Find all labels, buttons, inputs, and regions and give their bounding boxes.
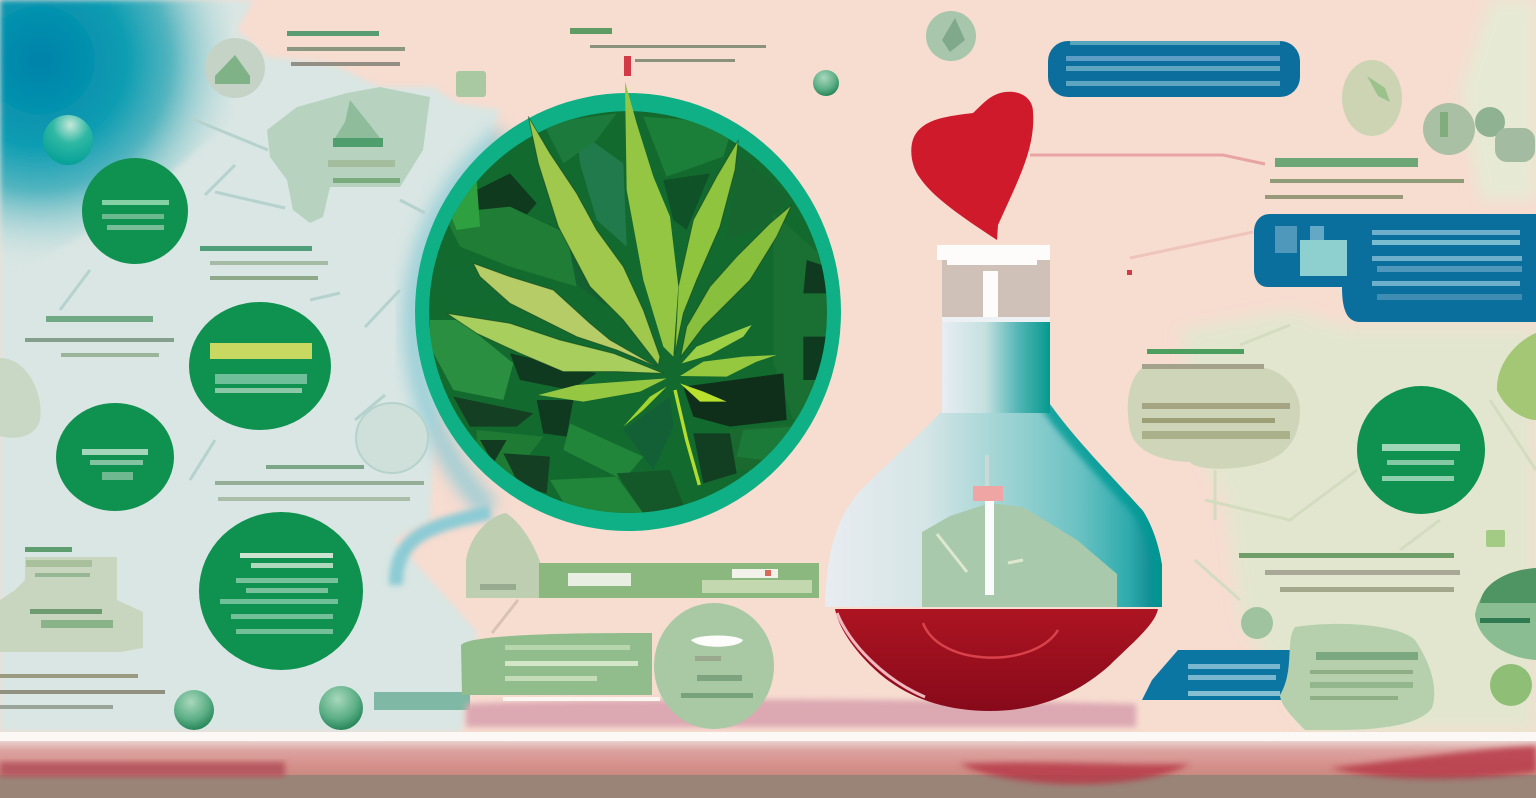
icon: small blob xyxy=(1241,607,1273,639)
pink shadow under flask xyxy=(466,700,1136,727)
connector lines left xyxy=(60,118,425,480)
icon: green sphere bottom 2 xyxy=(319,686,363,730)
faint foliage veins right xyxy=(1195,325,1536,600)
panel: green circle 2 xyxy=(189,302,331,430)
icon: chart tile xyxy=(1275,226,1347,276)
icon: top leaf badge xyxy=(926,11,976,61)
panel: green circle right xyxy=(1357,386,1485,514)
icon: small square top xyxy=(456,71,486,97)
blue glow beside leaf circle xyxy=(414,135,505,510)
icon: small sphere top xyxy=(813,70,839,96)
right side icons xyxy=(1241,60,1536,706)
text block: right lower xyxy=(1239,553,1460,592)
panel: right beige blob xyxy=(1128,349,1300,469)
flask cap xyxy=(937,245,1050,260)
panel: right lower blob xyxy=(1280,624,1434,730)
pale blue-green left field xyxy=(0,0,500,732)
panel: green circle 1 xyxy=(82,158,188,264)
map blob xyxy=(267,87,430,223)
text block: far left xyxy=(25,316,174,357)
outlined circle xyxy=(356,403,428,473)
icon: half circle panel xyxy=(1475,568,1536,660)
icon: leaf xyxy=(447,82,792,485)
thermometer xyxy=(973,455,1003,595)
illustration: cannabis leaf in circle xyxy=(415,82,841,531)
circle ring xyxy=(415,93,841,531)
icon: small square xyxy=(1486,530,1505,547)
left edge leaf blob xyxy=(0,358,41,438)
liquid green xyxy=(922,503,1117,607)
panel: blue callout top xyxy=(1048,41,1300,97)
panel: blue callout bottom xyxy=(1142,650,1300,700)
panel: blue callout right xyxy=(1254,214,1536,322)
flask body xyxy=(820,400,1170,612)
icon: heart xyxy=(911,92,1033,240)
text block: right heading xyxy=(1265,158,1464,199)
foliage mosaic xyxy=(429,111,827,513)
floor band xyxy=(0,732,1536,798)
floor shadow center xyxy=(960,763,1190,784)
panel: green circle 3 xyxy=(56,403,174,511)
panel: lower green bar xyxy=(461,633,660,701)
panel: center green label bar xyxy=(466,513,819,598)
pale foliage corner top right xyxy=(1460,0,1536,200)
small red markers xyxy=(624,56,1132,275)
flask neck xyxy=(942,317,1050,413)
panel: lower green circle xyxy=(654,603,774,729)
panel: lower-left blob xyxy=(0,547,143,652)
teal swirl under leaf xyxy=(374,512,490,710)
text block: lower left xyxy=(0,674,165,709)
text block: center left xyxy=(200,246,328,280)
text block: top center xyxy=(570,28,766,62)
floor shadow right xyxy=(1330,746,1536,779)
icon: green sphere bottom 1 xyxy=(174,690,214,730)
icon: top-left tree badge xyxy=(205,38,265,98)
teal corner wash xyxy=(0,0,230,280)
red liquid xyxy=(835,609,1158,711)
icon: light green ball xyxy=(1490,664,1532,706)
text block: top left xyxy=(287,31,405,66)
illustration: flask xyxy=(820,245,1170,711)
floor shadow left xyxy=(0,762,285,777)
icon: leaf right edge xyxy=(1497,333,1536,420)
connector lines from heart xyxy=(1030,155,1265,258)
icon: teal sphere xyxy=(43,115,93,165)
icon: oval top right xyxy=(1342,60,1402,136)
connector xyxy=(492,600,518,633)
panel: green circle 4 xyxy=(199,512,363,670)
icon: green cluster xyxy=(1423,103,1535,162)
pale green wash right xyxy=(1180,310,1536,732)
text block: lower center xyxy=(215,465,424,501)
